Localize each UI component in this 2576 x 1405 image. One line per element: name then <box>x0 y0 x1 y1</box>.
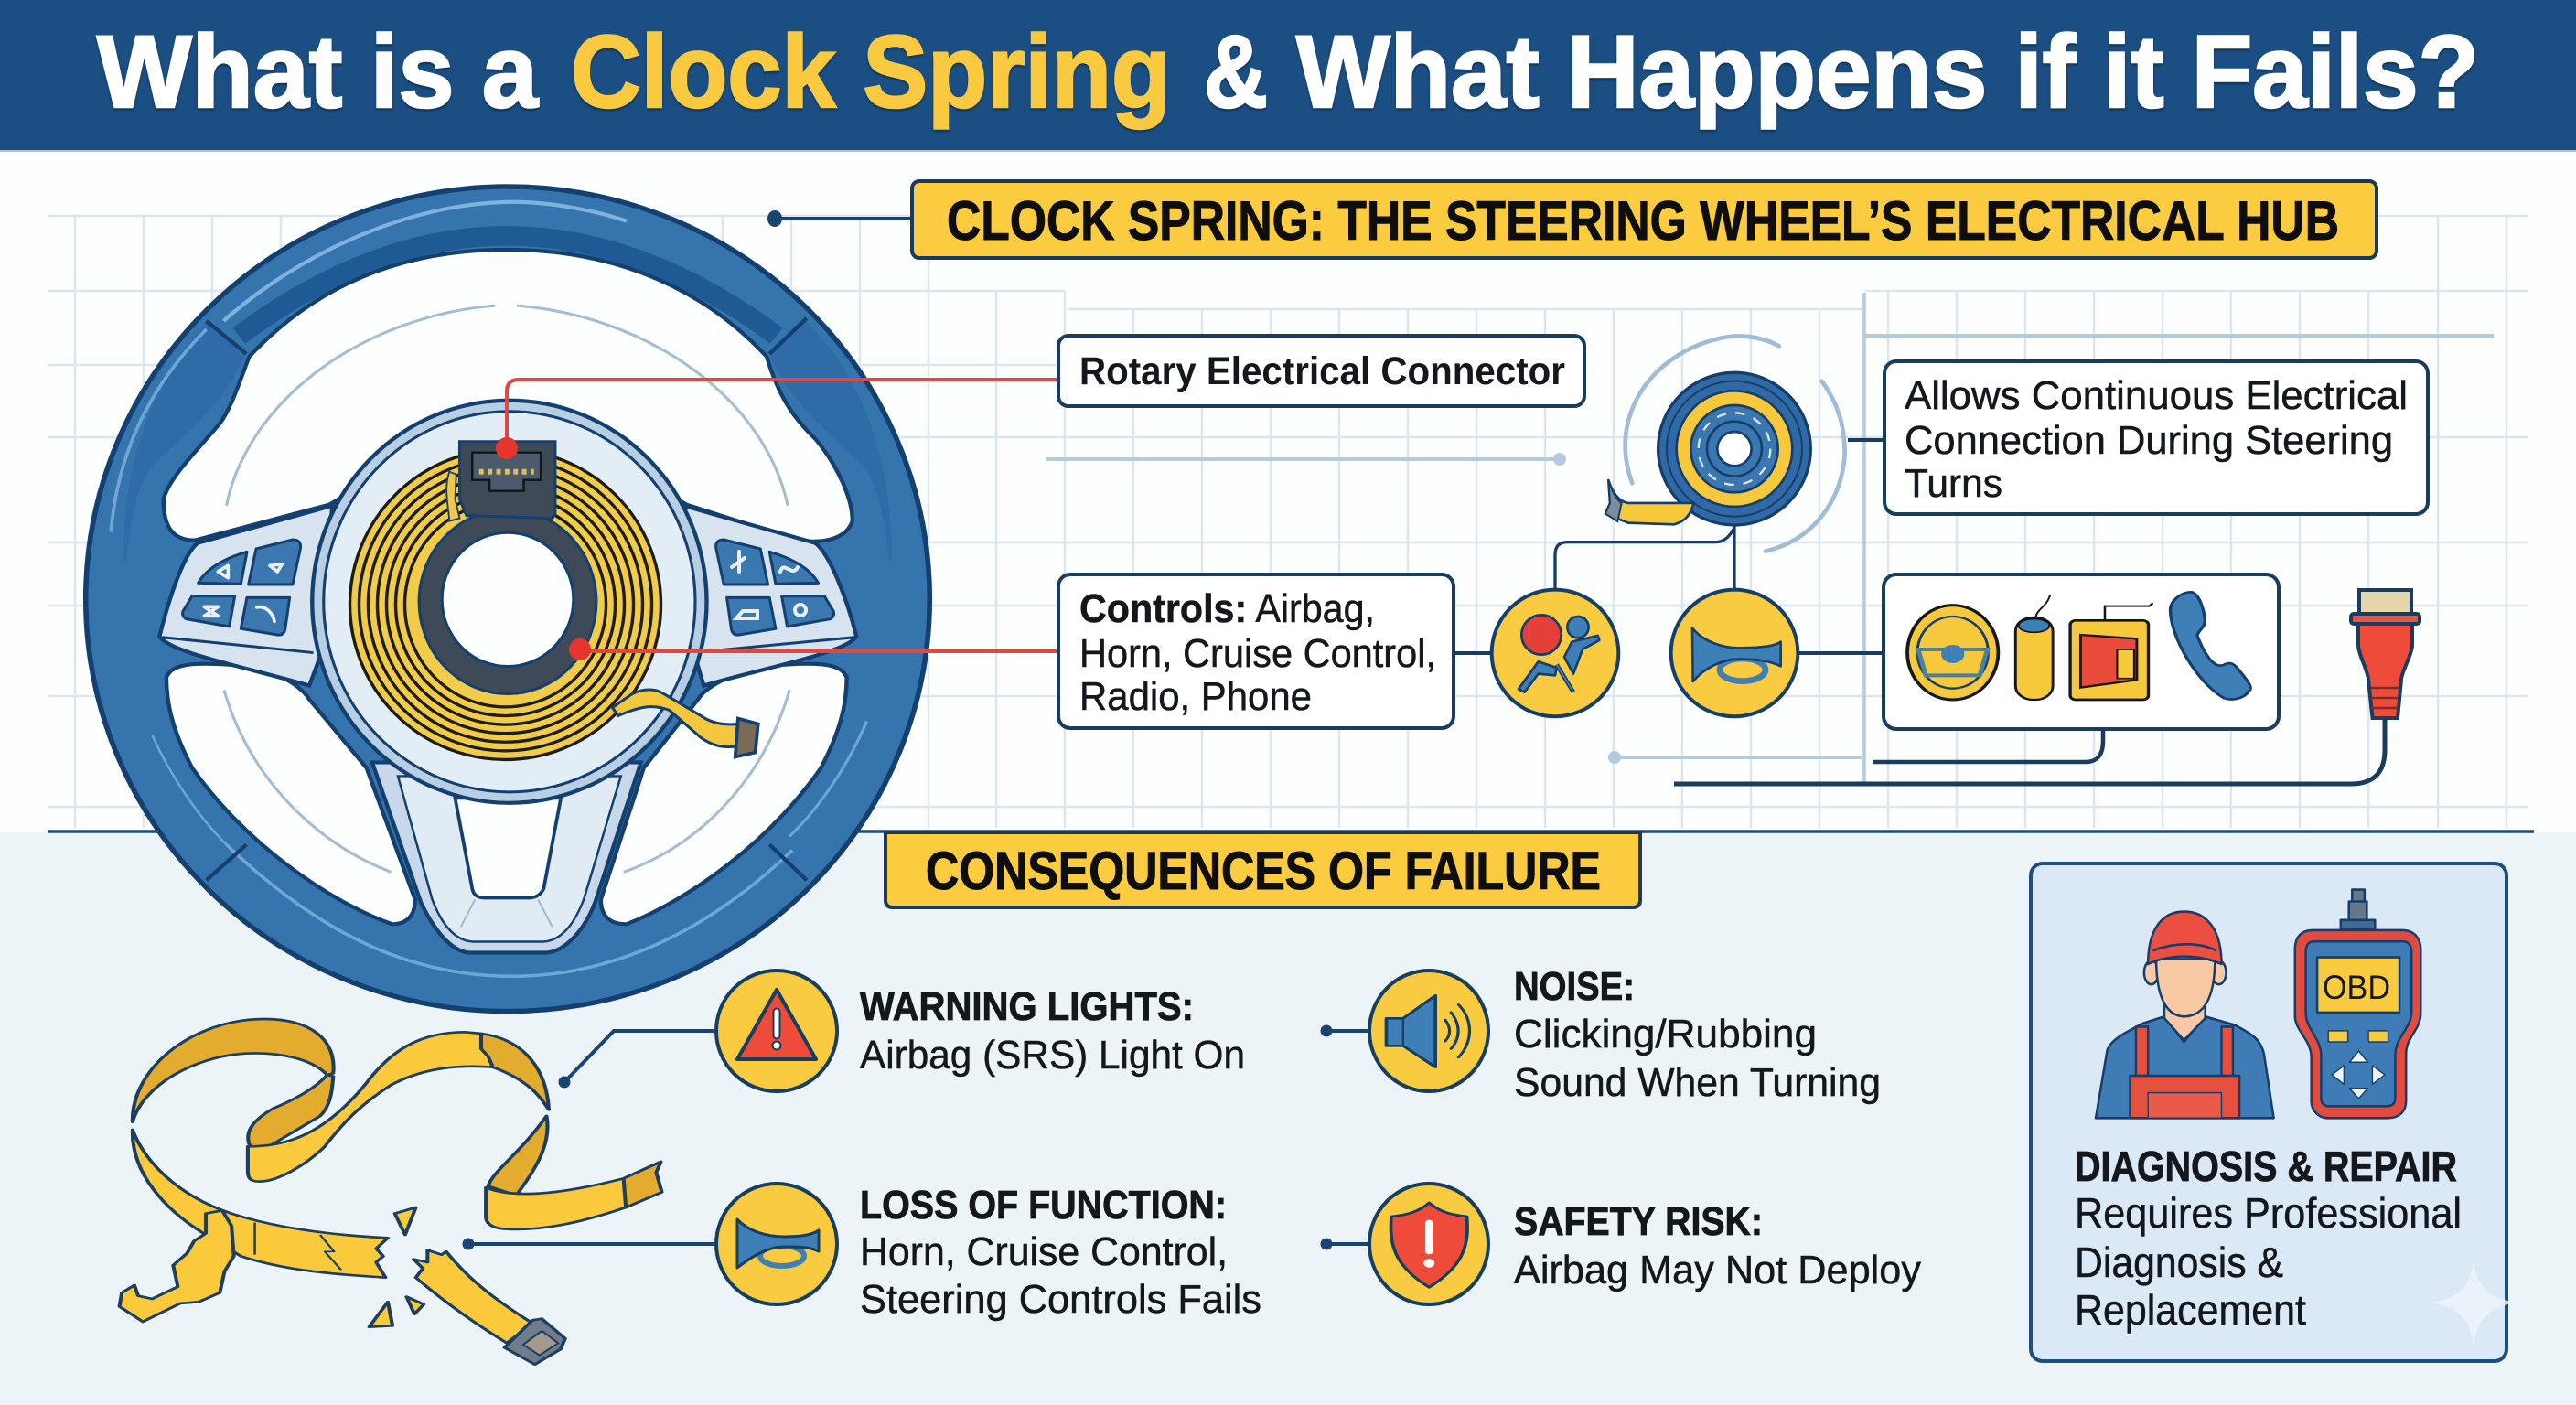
red callout line: rotary connector <box>496 380 1058 459</box>
motion arcs <box>1626 336 1845 552</box>
plug <box>505 1319 565 1365</box>
scanner screen label: OBD <box>2323 969 2390 1006</box>
ribbon descending fold <box>488 1116 548 1196</box>
ribbon cable tail <box>612 690 758 756</box>
wire to info box <box>1848 438 1884 442</box>
ribbon front end <box>486 1162 661 1229</box>
coil hub and central bore <box>419 509 596 694</box>
title: ampersand: & <box>1204 15 1268 129</box>
info box: continuous connection: Connection During Steering <box>1905 418 2393 463</box>
panel text <box>2075 1142 2462 1334</box>
text: warning lights: Airbag (SRS) Light On <box>860 1033 1245 1078</box>
text: safety risk: Airbag May Not Deploy <box>1514 1248 1921 1292</box>
section banner: clock spring electrical hub: CLOCK SPRING: THE STEERING WHEEL’S ELECTRICAL HUB <box>947 190 2339 252</box>
torn piece <box>120 1210 234 1322</box>
wires from features box and plug <box>1674 720 2385 784</box>
text: noise: Sound When Turning <box>1514 1060 1881 1105</box>
detached ribbon end <box>413 1250 532 1343</box>
header bar with title <box>0 0 2576 152</box>
ribbon back loop <box>133 1019 334 1122</box>
coil connector block <box>446 442 555 521</box>
info box: continuous connection: Allows Continuous Electrical <box>1905 373 2408 418</box>
info box: continuous connection: Turns <box>1905 461 2002 506</box>
right button cluster <box>716 540 834 635</box>
connector lines between control icons <box>1454 651 1884 655</box>
panel: diagnosis and repair <box>2031 863 2506 1361</box>
label box: rotary electrical connector: Rotary Electrical Connector <box>1079 349 1565 393</box>
lower right opening <box>601 664 847 924</box>
text: loss of function: LOSS OF FUNCTION: <box>860 1183 1227 1228</box>
ribbon inner fold <box>248 1075 333 1146</box>
text: safety risk: SAFETY RISK: <box>1514 1199 1763 1244</box>
text: safety risk <box>1514 1199 1921 1292</box>
section banner: consequences of failure: CONSEQUENCES OF FAILURE <box>926 842 1601 901</box>
title: What Happens if it Fails: What Happens if it Fails? <box>1296 15 2479 129</box>
title: What is a: What is a <box>97 15 539 129</box>
icons: gauge, cruise stalk, radio, phone <box>1907 592 2250 700</box>
wheel guide arcs <box>224 306 789 872</box>
bottom spoke <box>372 762 641 952</box>
small clock spring diagram <box>1555 336 1845 590</box>
label box: controls: Controls: Airbag, <box>1079 586 1375 631</box>
label box: controls <box>1058 574 1454 728</box>
icon: horn loss of function <box>716 1184 837 1304</box>
icon: OBD scanner <box>2295 890 2420 1118</box>
icon: shield <box>1369 1184 1488 1304</box>
icon: speaker <box>1369 971 1488 1091</box>
red callout line: controls <box>569 638 1058 660</box>
callout line: safety risk <box>1321 1239 1369 1249</box>
wheel rim <box>86 187 929 1012</box>
text: noise: NOISE: <box>1514 964 1635 1009</box>
text: loss of function <box>860 1183 1261 1322</box>
clock spring coil <box>349 449 660 759</box>
upper opening <box>164 250 853 542</box>
connector line and dot to section banner <box>767 210 913 227</box>
label box: controls: Horn, Cruise Control, <box>1079 631 1436 676</box>
broken ribbon cable illustration <box>120 1019 661 1365</box>
ribbon stub <box>1605 480 1694 524</box>
text: loss of function: Steering Controls Fails <box>860 1277 1261 1322</box>
icon: warning triangle <box>716 971 837 1091</box>
label box: controls: Radio, Phone <box>1079 674 1312 719</box>
panel text: Requires Professional <box>2075 1189 2462 1237</box>
ribbon S curve <box>248 1032 493 1182</box>
icon: mechanic <box>2096 912 2274 1118</box>
callout line: warning lights <box>558 1031 717 1089</box>
lower left opening <box>166 664 415 924</box>
coil disc <box>1658 372 1810 525</box>
label box: rotary electrical connector <box>1058 336 1584 406</box>
left spoke <box>159 506 332 686</box>
central hub rings <box>312 401 706 803</box>
callout line: noise <box>1321 1024 1369 1037</box>
left button cluster <box>183 540 301 635</box>
steering wheel illustration <box>86 187 929 1012</box>
icon: red connector plug <box>2351 590 2420 718</box>
text: noise: Clicking/Rubbing <box>1514 1012 1817 1056</box>
controlled features box <box>1884 574 2279 729</box>
info box: continuous connection <box>1884 361 2428 514</box>
panel text: Replacement <box>2075 1286 2306 1334</box>
panel text: Diagnosis & <box>2075 1239 2283 1286</box>
right spoke <box>684 506 856 686</box>
shards <box>370 1207 424 1327</box>
panel text: DIAGNOSIS & REPAIR <box>2075 1142 2457 1190</box>
text: warning lights <box>860 984 1245 1078</box>
title: Clock Spring: Clock Spring <box>571 15 1171 129</box>
ribbon right back <box>481 1034 549 1110</box>
icon: airbag <box>1492 590 1618 716</box>
callout line: loss of function <box>463 1239 717 1249</box>
icon: horn <box>1671 590 1798 716</box>
connection wires <box>1555 524 1734 590</box>
icon: sparkle watermark <box>2431 1260 2517 1346</box>
text: warning lights: WARNING LIGHTS: <box>860 984 1194 1029</box>
text: noise <box>1514 964 1881 1105</box>
ribbon lower band <box>133 1130 388 1278</box>
text: loss of function: Horn, Cruise Control, <box>860 1229 1228 1274</box>
